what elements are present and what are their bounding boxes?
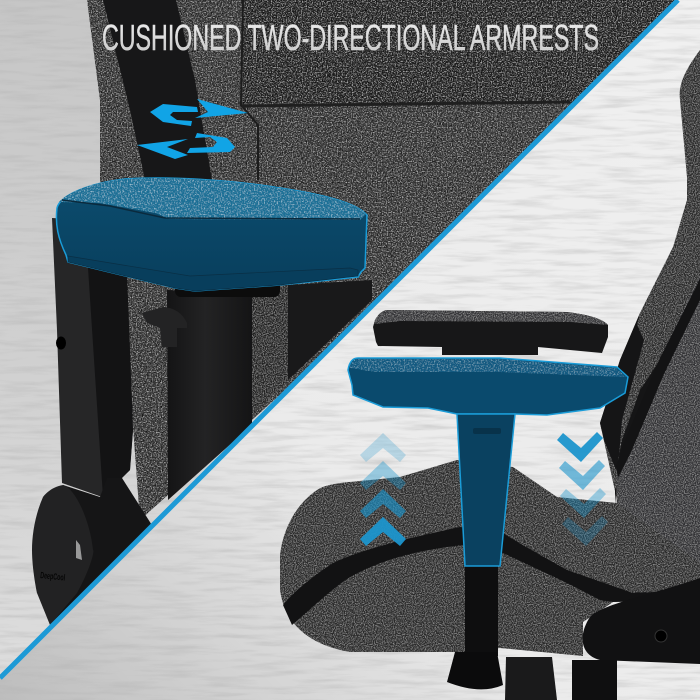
chair seat	[280, 460, 700, 656]
icon: chevrons up	[360, 433, 406, 546]
black armrest frame and posts	[52, 218, 372, 500]
height lever	[142, 307, 187, 347]
blue armrest stem	[457, 414, 515, 566]
blue armrest cushion, close-up	[56, 178, 367, 291]
armrest support pole	[447, 564, 557, 700]
chair back fabric	[87, 0, 678, 520]
icon: rotate arrow right	[150, 99, 248, 126]
black armrest pad, raised position	[373, 310, 608, 355]
chair backrest	[600, 50, 700, 610]
icon: rotate arrow left	[137, 133, 235, 159]
caster wheel with brand label: DeepCool	[40, 570, 66, 583]
caster wheel with brand label	[32, 478, 155, 625]
seat bracket	[572, 578, 700, 700]
blue armrest pad, lowered position	[348, 358, 628, 566]
icon: chevrons down	[557, 432, 608, 546]
